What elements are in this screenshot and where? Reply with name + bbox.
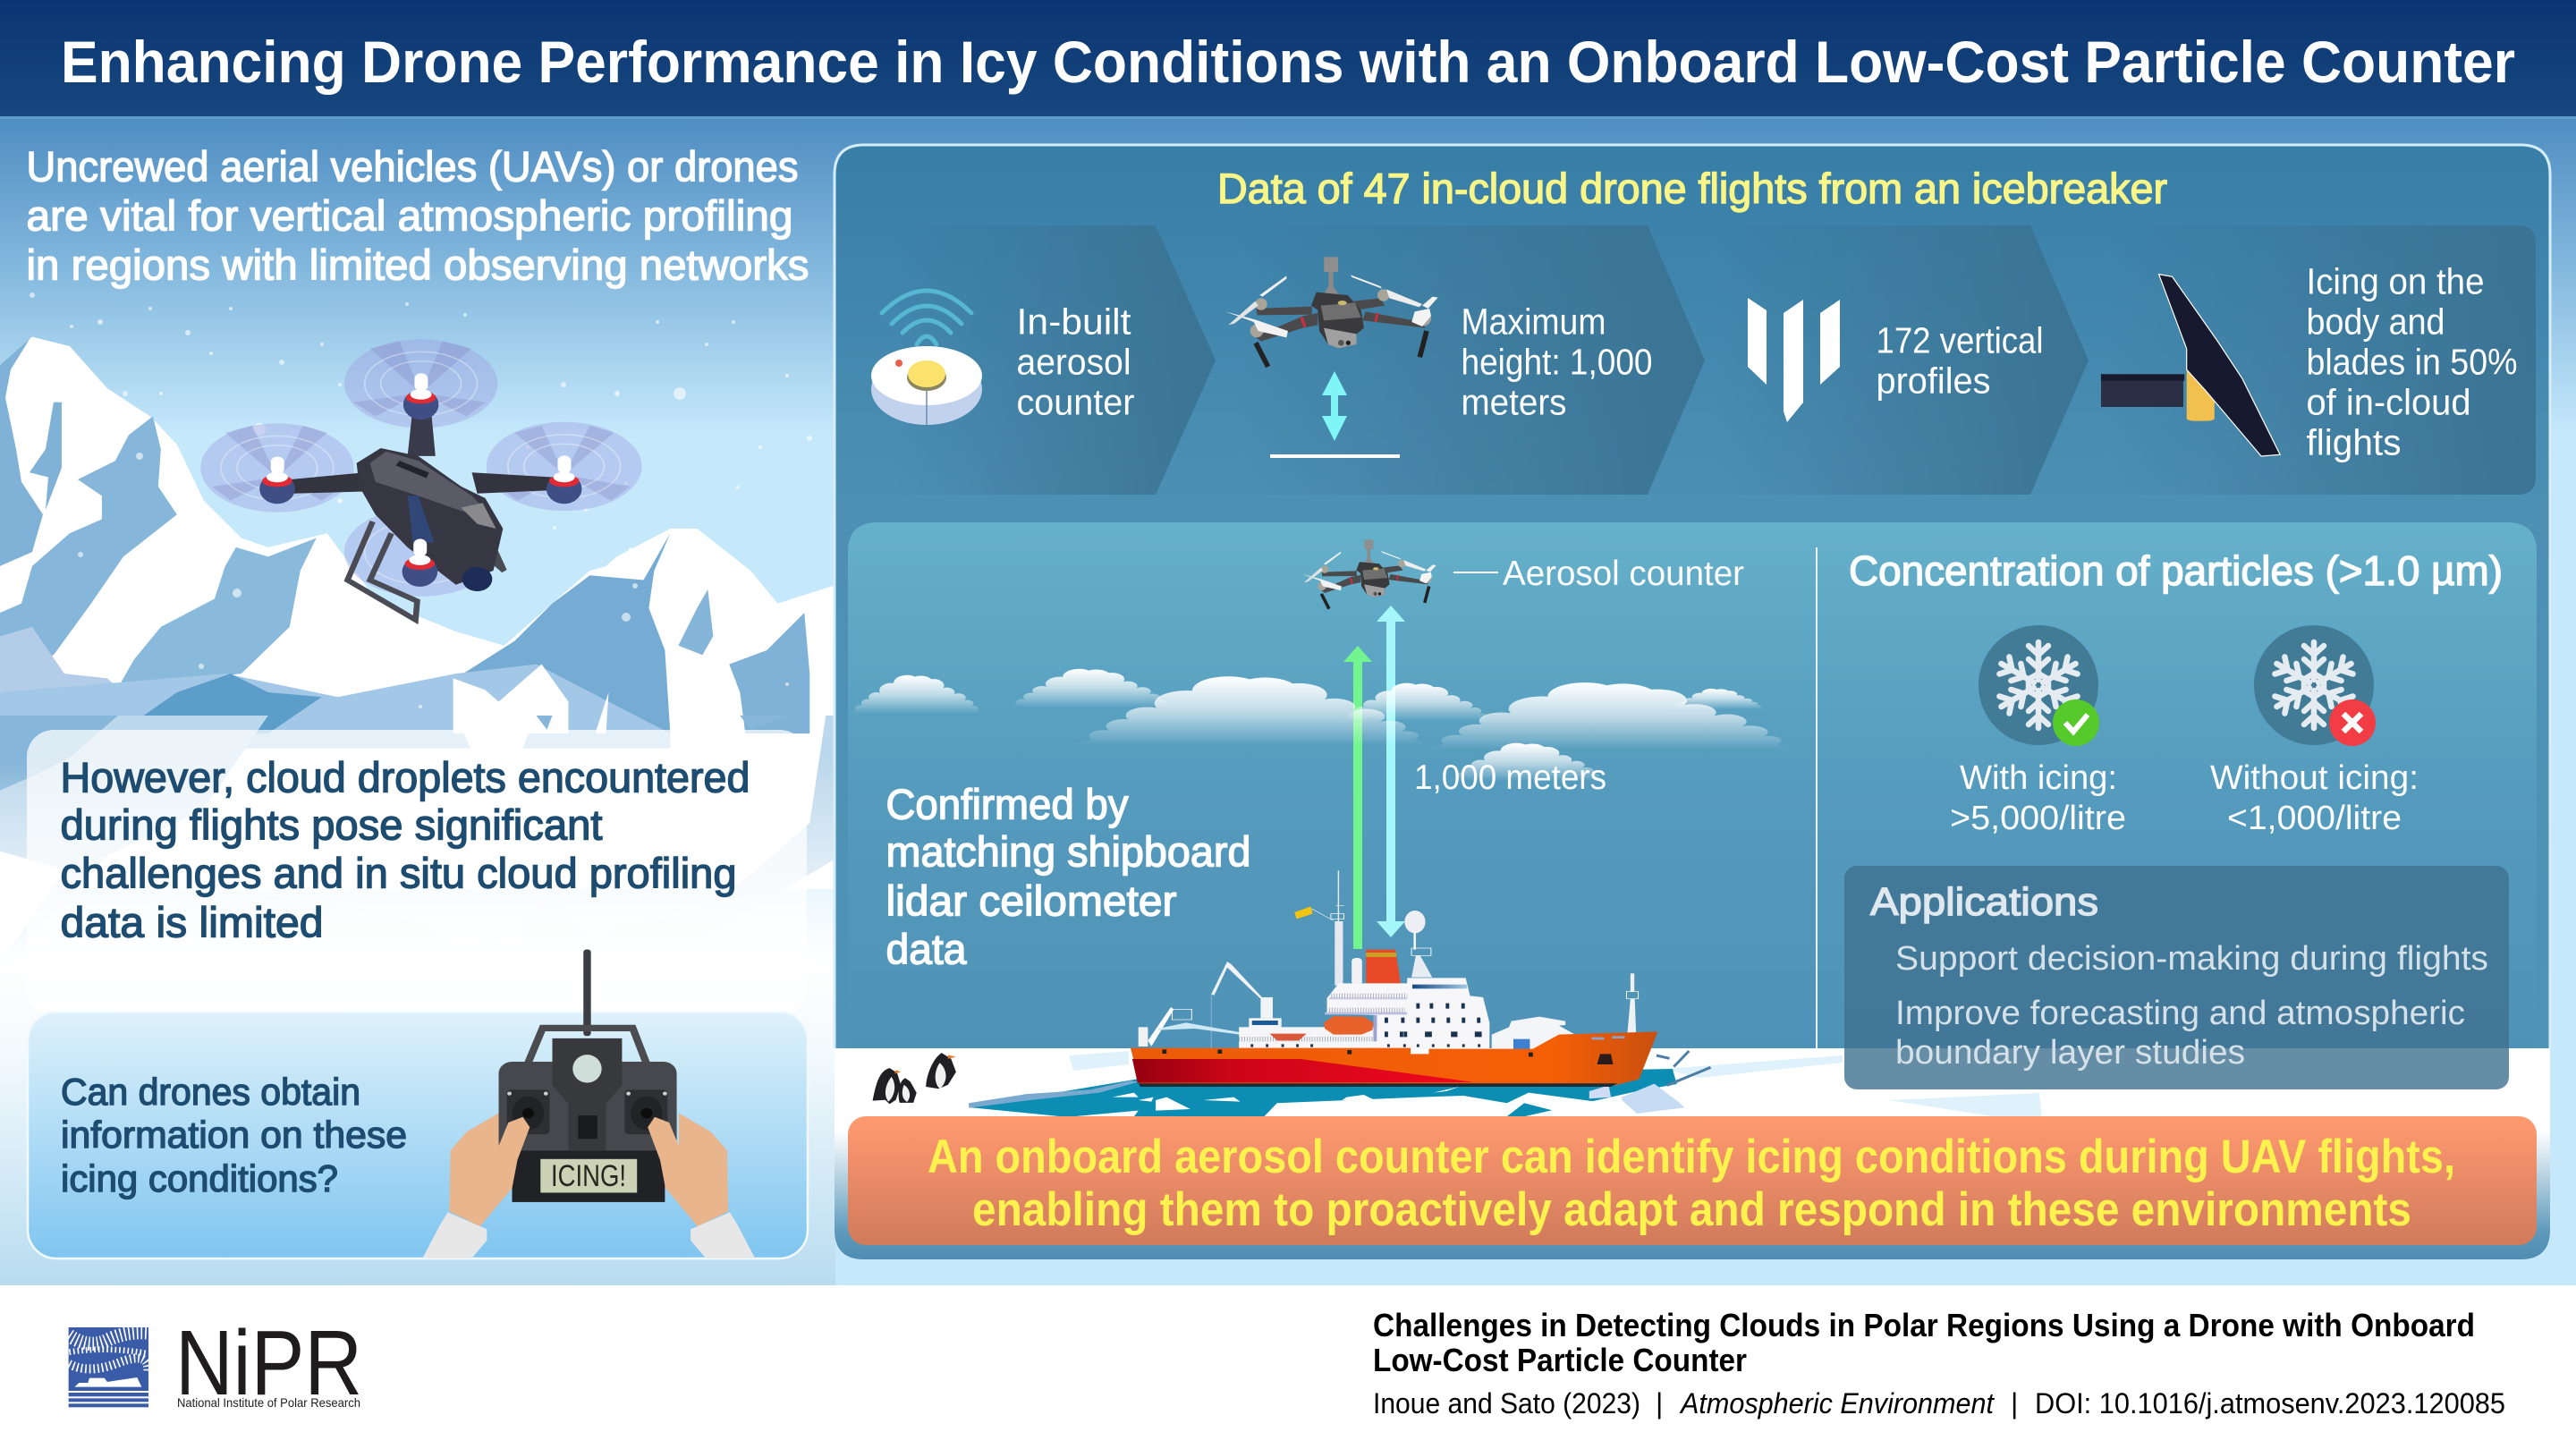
arrow: drone altitude [1377,606,1405,937]
hull [1131,1031,1657,1087]
text: in-built counter: aerosol [1016,342,1131,383]
text: with icing: With icing: [1960,759,2117,797]
divider [1816,547,1818,1048]
panel: conclusion [848,1116,2537,1245]
applications list [1895,940,2488,1072]
intro text: are vital for vertical atmospheric profiling [27,191,793,240]
chevron 3 [1648,225,2089,495]
text: in-built counter: counter [1016,381,1134,422]
text: with icing: >5,000/litre [1950,800,2126,837]
icon: vertical profiles [1748,298,1840,422]
applications list: Improve forecasting and atmospheric [1895,995,2465,1032]
icon: with icing [1979,625,2099,746]
citation: Inoue and Sato (2023) [1373,1387,1640,1419]
conclusion text [928,1131,2455,1236]
arrow: height [1270,371,1400,458]
challenge text: However, cloud droplets encountered [61,753,750,801]
panel: applications [1844,866,2509,1089]
display text: ICING! [551,1159,626,1193]
challenge text: data is limited [61,898,324,946]
panel: ship scene and concentration [848,522,2537,1048]
mast and rear equipment [1139,870,1432,1048]
illustration: snowy mountains [0,337,841,968]
text: without icing [2210,759,2419,837]
logo mark [69,1327,148,1407]
title bar [0,0,2576,119]
text: maximum height [1462,301,1653,422]
chevron 4 [2030,225,2536,495]
logo wordmark: NiPR [175,1311,362,1414]
rotor discs [200,339,642,597]
logo subtitle: National Institute of Polar Research [177,1395,360,1410]
footer [0,1285,2576,1449]
logo: NiPR [69,1311,362,1414]
applications heading: Applications [1870,880,2098,924]
intro text: Uncrewed aerial vehicles (UAVs) or drones [27,143,798,190]
text: icing: flights [2306,422,2401,463]
text: profiles [1877,320,2043,401]
motors [259,373,581,587]
challenge text: during flights pose significant [61,801,603,848]
label: 1,000 meters: 1,000 meters [1414,758,1606,797]
challenge text: challenges and in situ cloud profiling [61,850,737,896]
text: confirmed by lidar: data [886,925,967,973]
text: profiles: 172 vertical [1877,320,2043,361]
rotor blade wedges [212,342,630,501]
illustration: large quadcopter drone [200,339,642,620]
text: profiles: profiles [1877,360,1991,401]
illustration: penguins [873,1053,956,1104]
heading: concentration of particles: Concentration of particles (>1.0 µm) [1849,547,2503,594]
text: icing: blades in 50% [2306,342,2517,383]
text: maximum height: Maximum [1462,301,1606,342]
water and floes [969,1051,1711,1118]
icon: drone [1225,257,1438,367]
panel rim [835,1118,2550,1259]
ice field [835,1048,2550,1118]
chevron flow: study data [837,225,2536,495]
superstructure [1239,973,1639,1049]
chevron 1 [837,225,1216,495]
citation [1373,1307,2505,1419]
applications list: boundary layer studies [1895,1034,2245,1072]
text: without icing: Without icing: [2210,759,2419,797]
icon: aerosol counter [871,291,982,425]
icon: hands holding remote controller [422,950,755,1258]
question text: Can drones obtain [61,1071,360,1113]
question text: icing conditions? [61,1157,338,1199]
text: icing: body and [2306,301,2445,342]
citation: Low-Cost Particle Counter [1373,1342,1747,1378]
applications list: Support decision-making during flights [1895,940,2488,978]
snowfall dots [30,292,812,708]
panel: challenge statement [27,730,807,1016]
citation: | [1656,1387,1663,1419]
question text [61,1071,407,1199]
text: icing: Icing on the [2306,261,2485,302]
text: confirmed by lidar: matching shipboard [886,828,1250,875]
icon: drone with aerosol counter [1302,539,1436,609]
chevron 2 [1156,225,1705,495]
illustration: icebreaker ship [969,870,1711,1118]
citation: DOI: 10.1016/j.atmosenv.2023.120085 [2035,1387,2505,1419]
panel: question [28,950,808,1258]
left panel lower fade [0,760,835,1288]
rotor rings [221,352,621,584]
faint ice tints [1069,1051,2042,1118]
citation: Atmospheric Environment [1679,1387,1995,1419]
icon: iced propeller [2101,275,2280,456]
conclusion text: enabling them to proactively adapt and respond in these environments [972,1183,2411,1236]
text: maximum height: meters [1462,381,1567,422]
text: in-built counter: In-built [1016,301,1131,342]
text: in-built counter [1016,301,1134,422]
intro text [27,143,809,288]
text: confirmed by lidar [886,780,1250,973]
text: icing [2306,261,2517,463]
label: aerosol counter: Aerosol counter [1503,555,1744,593]
challenge text [61,753,750,946]
intro text: in regions with limited observing networks [27,242,809,288]
icon: without icing [2254,625,2376,746]
text: without icing: <1,000/litre [2227,800,2402,837]
text: confirmed by lidar: lidar ceilometer [886,877,1177,925]
text: confirmed by lidar: Confirmed by [886,780,1129,828]
text: icing: of in-cloud [2306,381,2470,422]
text: maximum height: height: 1,000 [1462,342,1653,383]
heading: Data of 47 in-cloud drone flights from an icebreaker [1217,165,2167,212]
arrow: lidar beam [1343,646,1372,949]
question text: information on these [61,1114,407,1156]
clouds [848,669,1792,781]
citation: Challenges in Detecting Clouds in Polar Regions Using a Drone with Onboard [1373,1307,2475,1343]
citation: | [2011,1387,2018,1419]
text: with icing [1950,759,2126,837]
